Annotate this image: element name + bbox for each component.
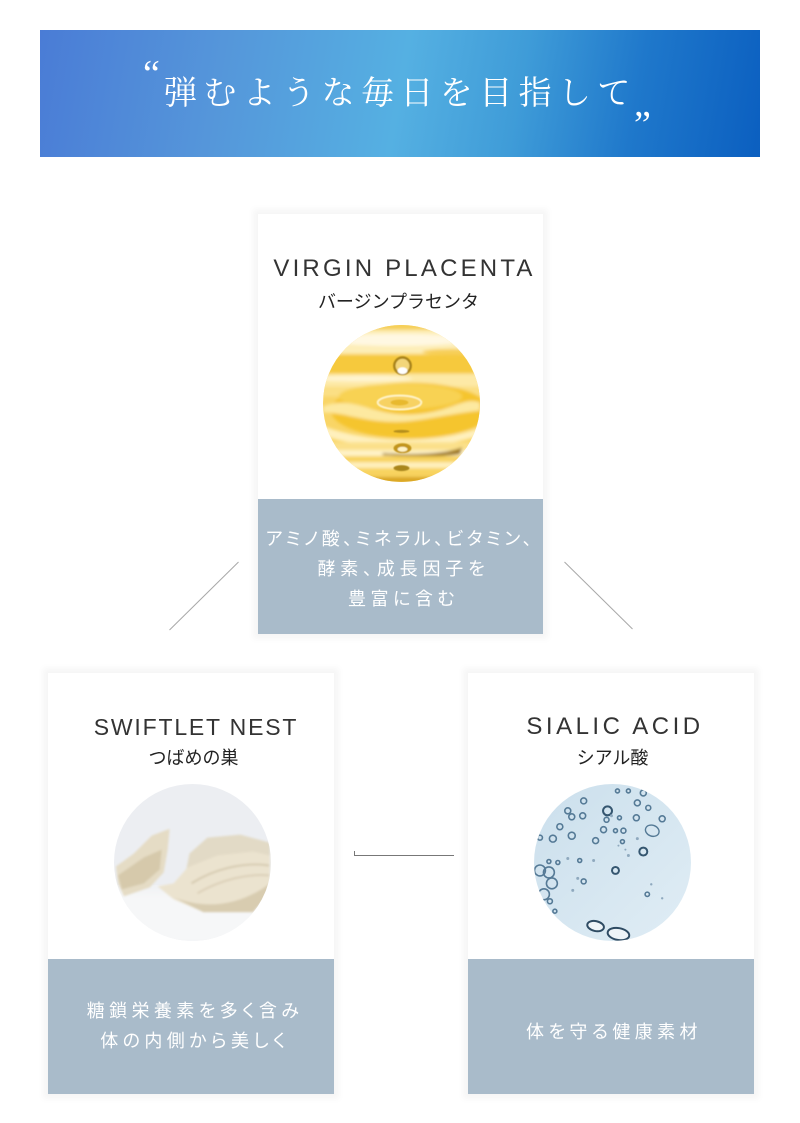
description line 1: 体を守る健康素材 (526, 1022, 702, 1042)
panel: sialic acid (468, 673, 754, 1094)
image: swiftlet nest pieces (114, 784, 271, 941)
description line 2: 酵素、成長因子を (317, 559, 490, 579)
text box: virgin placenta description (258, 499, 543, 634)
description line 1: 糖鎖栄養素を多く含み (87, 1001, 303, 1021)
subheading: virgin placenta: バージンプラセンタ (318, 292, 479, 312)
title text: 弾むような毎日を目指して (164, 76, 637, 112)
text box: swiftlet nest description (48, 959, 334, 1094)
image: water bubbles (534, 784, 691, 941)
title banner (40, 30, 760, 157)
heading: sialic acid: SIALIC ACID (526, 713, 704, 740)
image: golden oil droplet ripple (323, 325, 480, 482)
panel: swiftlet nest (48, 673, 334, 1094)
heading: virgin placenta: VIRGIN PLACENTA (273, 255, 536, 282)
panel: virgin placenta (258, 214, 543, 634)
connector line: left card to right card (354, 851, 454, 856)
description line 1: アミノ酸、ミネラル、ビタミン、 (266, 529, 535, 549)
text box: sialic acid description (468, 959, 754, 1094)
subheading: sialic acid: シアル酸 (577, 748, 648, 768)
connector line: top card to right card (564, 562, 633, 630)
connector line: top card to left card (169, 562, 239, 630)
description line 2: 体の内側から美しく (100, 1031, 290, 1051)
heading: swiftlet nest: SWIFTLET NEST (94, 714, 298, 740)
description line 3: 豊富に含む (348, 589, 459, 609)
subheading: swiftlet nest: つばめの巣 (148, 748, 238, 768)
closing quote: ” (634, 104, 651, 146)
opening quote: “ (143, 53, 160, 95)
